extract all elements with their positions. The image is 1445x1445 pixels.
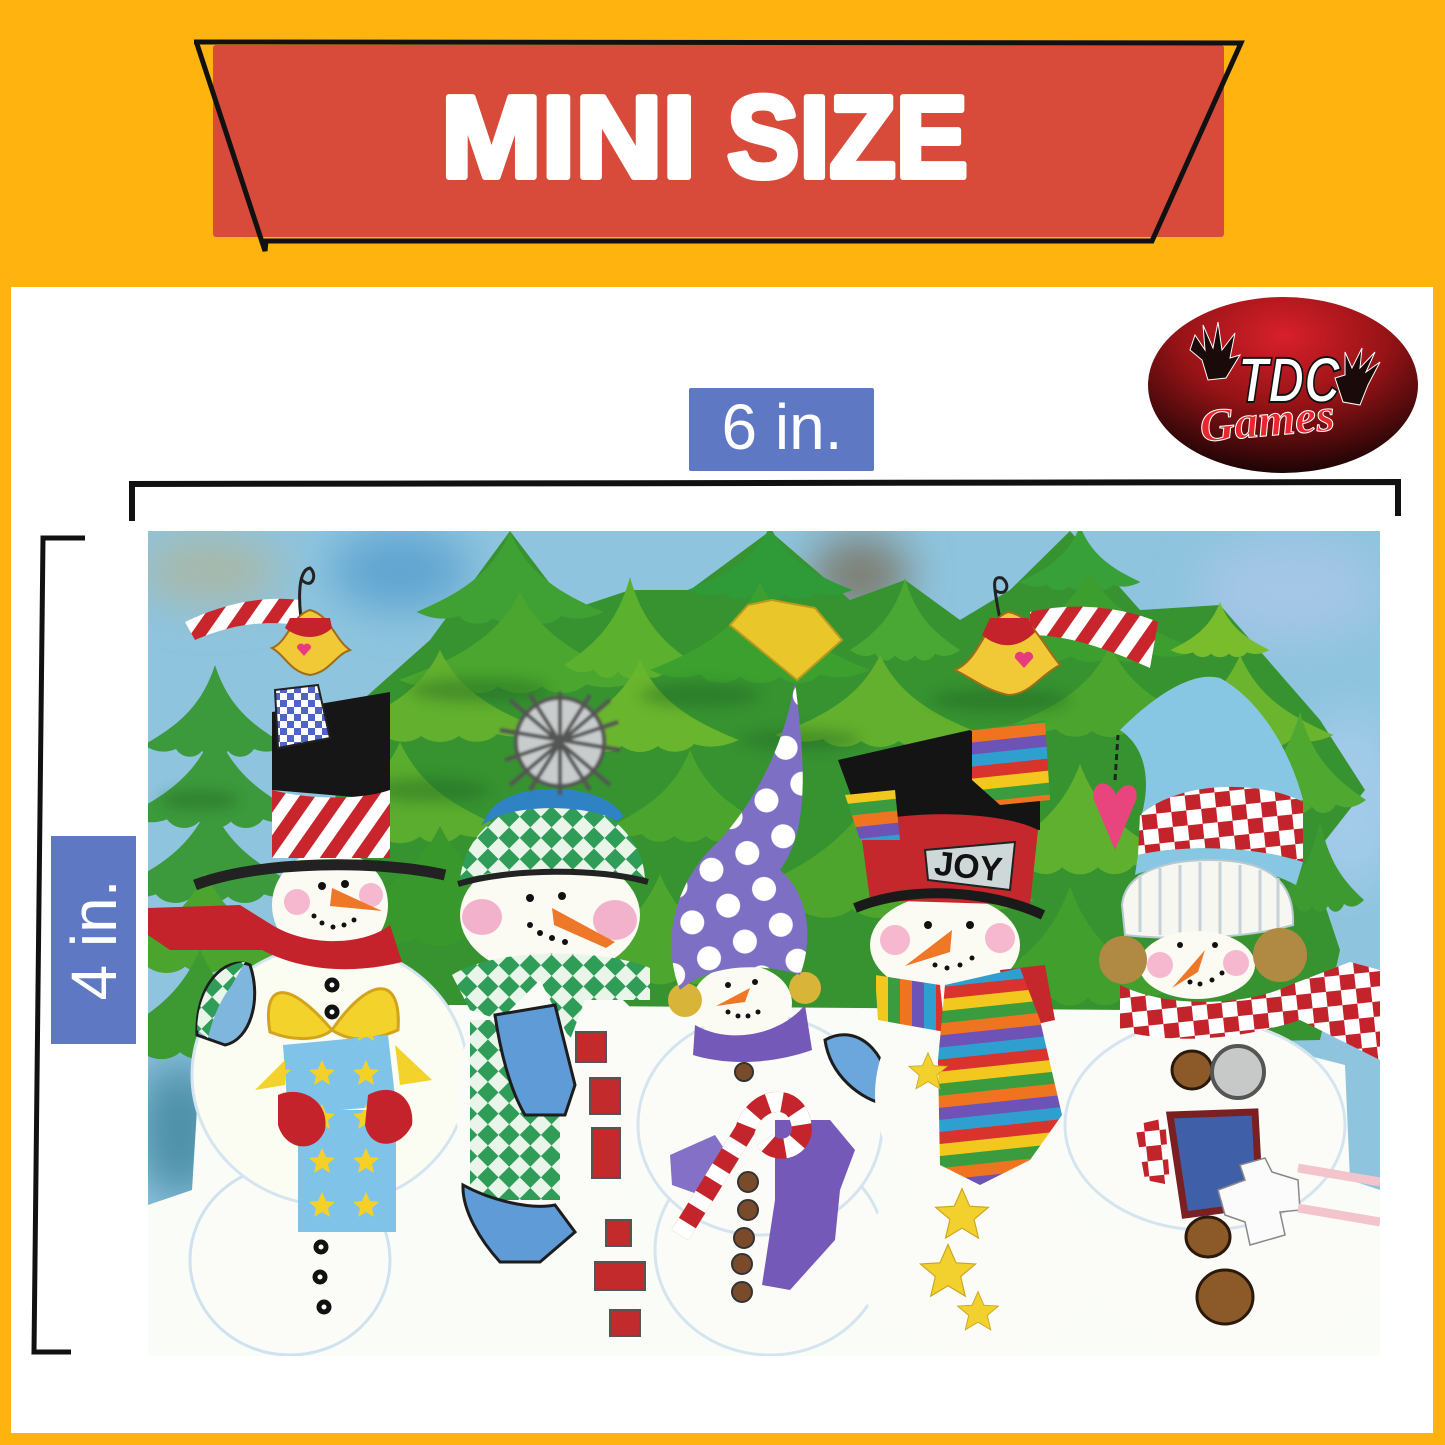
bow (268, 989, 398, 1039)
cheeks (1147, 952, 1173, 978)
red mittens (278, 1092, 326, 1146)
boughs upper (416, 532, 604, 624)
logo text TDC: TDC (1238, 344, 1341, 416)
title text: SIZE (727, 72, 968, 202)
snowman 5 (1065, 677, 1380, 1355)
ear puffs (668, 983, 702, 1017)
joy sign: JOY (932, 845, 1004, 890)
logo: TDC Games (1148, 297, 1418, 473)
blue mitten upper (495, 1005, 575, 1115)
head (870, 895, 1020, 995)
gift (283, 1035, 396, 1115)
logo text Games: Games (1198, 389, 1337, 452)
snowman 1 (148, 692, 468, 1355)
eyes and smile (526, 892, 568, 945)
striped ribbon on hat (845, 790, 900, 840)
snowman 4 (838, 720, 1105, 1355)
bird body (272, 610, 350, 675)
boughs middle (390, 650, 520, 742)
height bracket (34, 538, 85, 1352)
eyes and smile (312, 880, 356, 930)
width label: 6 in. (689, 388, 874, 471)
bird and scarf left (185, 568, 350, 748)
mitten checks (1135, 1118, 1170, 1185)
blue under band (1135, 848, 1303, 885)
buttons (315, 980, 337, 1312)
blue hat tip (1120, 677, 1303, 820)
hat crown (272, 692, 390, 800)
pine trees (90, 526, 1366, 1060)
white knit cap (1122, 860, 1293, 938)
nose (1172, 950, 1205, 988)
boughs lower (390, 742, 492, 844)
carrot nose (330, 888, 382, 911)
brim (855, 893, 1043, 915)
black hat crown (838, 730, 1040, 830)
hat brim (458, 872, 648, 884)
brown buttons (732, 1063, 758, 1302)
bird and scarf right (955, 578, 1158, 695)
head (272, 858, 388, 942)
banner red fill (213, 45, 1224, 237)
snow ground and snow bodies mass (148, 1005, 1380, 1356)
hanging scarf end (470, 1020, 560, 1200)
rainbow scarf collar (875, 975, 945, 1032)
blue mitten (825, 1035, 889, 1105)
nose (905, 930, 952, 966)
small checked gift (275, 685, 330, 748)
wire curl (298, 566, 316, 616)
cheeks (462, 899, 502, 935)
puzzle piece (1218, 1158, 1300, 1245)
white content panel (11, 287, 1433, 1433)
label text: 4 in. (58, 880, 130, 1000)
purple scarf (693, 1005, 812, 1062)
red hat band (860, 814, 1038, 905)
nose (716, 988, 750, 1006)
icon: right hand (1335, 348, 1380, 405)
scarf (148, 905, 402, 969)
mitten cuff (197, 962, 245, 1038)
height label: 4 in. (51, 836, 136, 1044)
candy cane (680, 1102, 802, 1235)
rainbow scarf end (938, 968, 1062, 1185)
snowman 3 (638, 600, 889, 1355)
label text: 6 in. (722, 391, 842, 463)
tall polka hat (671, 682, 807, 990)
head (460, 869, 640, 960)
tweezers (1298, 1168, 1380, 1222)
label box (51, 836, 136, 1044)
head (1139, 931, 1255, 999)
knit ribs (1140, 862, 1278, 937)
nose (552, 908, 615, 948)
yellow fan tassel (730, 600, 842, 680)
smile (725, 979, 760, 1018)
body (655, 1145, 885, 1355)
earmuffs (1099, 936, 1147, 984)
pink heart ornament (1093, 784, 1137, 850)
brown buttons (1172, 1051, 1253, 1324)
sky watercolor patches (135, 530, 1400, 1200)
bird scarf (982, 618, 1035, 645)
dark tree shading (160, 678, 1070, 810)
hat (460, 800, 645, 882)
striped scarf (185, 599, 300, 640)
banner black outline (194, 42, 1241, 251)
hat stripes (272, 790, 390, 858)
body (855, 1175, 1105, 1355)
blue mitten lower (463, 1185, 575, 1262)
smile (924, 921, 974, 970)
sky (148, 531, 1380, 1205)
striped scarf (1030, 607, 1158, 668)
bird heart (1015, 652, 1033, 668)
puzzle illustration (90, 526, 1400, 1356)
steam swirl (1212, 1046, 1264, 1098)
title text (441, 72, 968, 202)
left arm mitten (197, 963, 255, 1045)
bird heart (297, 644, 311, 656)
body (190, 1165, 390, 1355)
cheeks (880, 925, 910, 955)
brim (195, 865, 445, 885)
body (456, 980, 630, 1128)
icon: left hand (1190, 322, 1240, 380)
purple mitten (670, 1135, 735, 1195)
far left tree (148, 665, 281, 1060)
body (1090, 1185, 1380, 1355)
checked scarf (1120, 962, 1380, 1060)
forest mass (320, 531, 1365, 1060)
wire curl (995, 578, 1007, 620)
smile (1177, 942, 1224, 986)
title banner (194, 42, 1241, 251)
cheeks (284, 889, 310, 915)
bird body (955, 612, 1060, 695)
red square buttons (576, 1032, 645, 1336)
snowman 2 (452, 692, 665, 1336)
scarf (452, 953, 650, 1040)
title text: MINI (441, 72, 696, 202)
width bracket (132, 482, 1398, 521)
label box (689, 388, 874, 471)
head (692, 965, 792, 1041)
mug (1170, 1112, 1260, 1215)
yellow stars (909, 1053, 998, 1330)
logo oval (1148, 297, 1418, 473)
striped box on hat (972, 720, 1050, 805)
pompom (500, 692, 620, 795)
checked hat band (1138, 787, 1303, 862)
bird scarf (285, 618, 332, 637)
ornament string (1115, 735, 1118, 780)
